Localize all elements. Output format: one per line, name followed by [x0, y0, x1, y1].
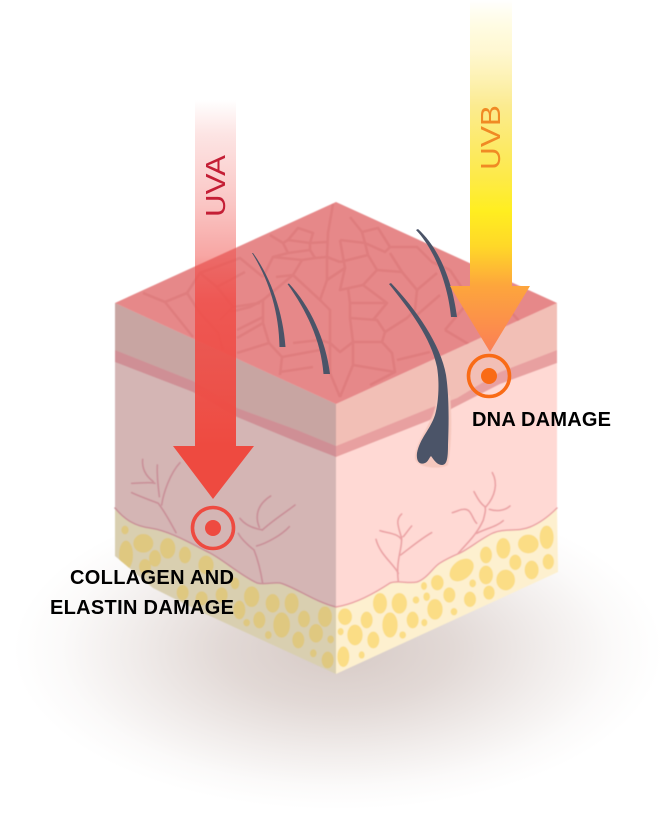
UVB label: UVB: [475, 105, 506, 170]
hair 4: large follicle: [389, 283, 449, 465]
right face: fat layer: [336, 508, 558, 674]
top face: skin surface with cracks: [115, 202, 557, 404]
UVA arrow: [173, 100, 254, 499]
target: DNA damage: [468, 356, 510, 396]
target: collagen damage: [192, 508, 234, 548]
label: collagen and elastin damage: ELASTIN DAMAGE: [50, 597, 234, 619]
left face: skin layers: [115, 303, 336, 625]
left face: fat layer: [115, 508, 336, 674]
UVA label: UVA: [200, 155, 231, 217]
label: collagen and elastin damage: [50, 567, 234, 619]
hair 3: [416, 229, 457, 317]
skin block: [115, 202, 558, 674]
cast shadow: [13, 490, 663, 810]
arrow shaft and head: [450, 0, 530, 352]
UVB arrow: [450, 0, 530, 352]
hair 1: [252, 253, 286, 347]
arrow shaft and head: [173, 100, 254, 499]
right face: dermis boundary and blood vessels: [336, 473, 557, 607]
label: DNA damage: DNA DAMAGE: [472, 409, 611, 431]
hair 2: [288, 284, 330, 374]
infographic: UV damage to skin: [51, 6, 610, 780]
right face: skin layers: [336, 303, 557, 625]
hair 4: follicle halo: [415, 395, 451, 468]
left face: dermis boundary and blood vessels: [115, 459, 336, 607]
label: collagen and elastin damage: COLLAGEN AND: [70, 567, 234, 589]
